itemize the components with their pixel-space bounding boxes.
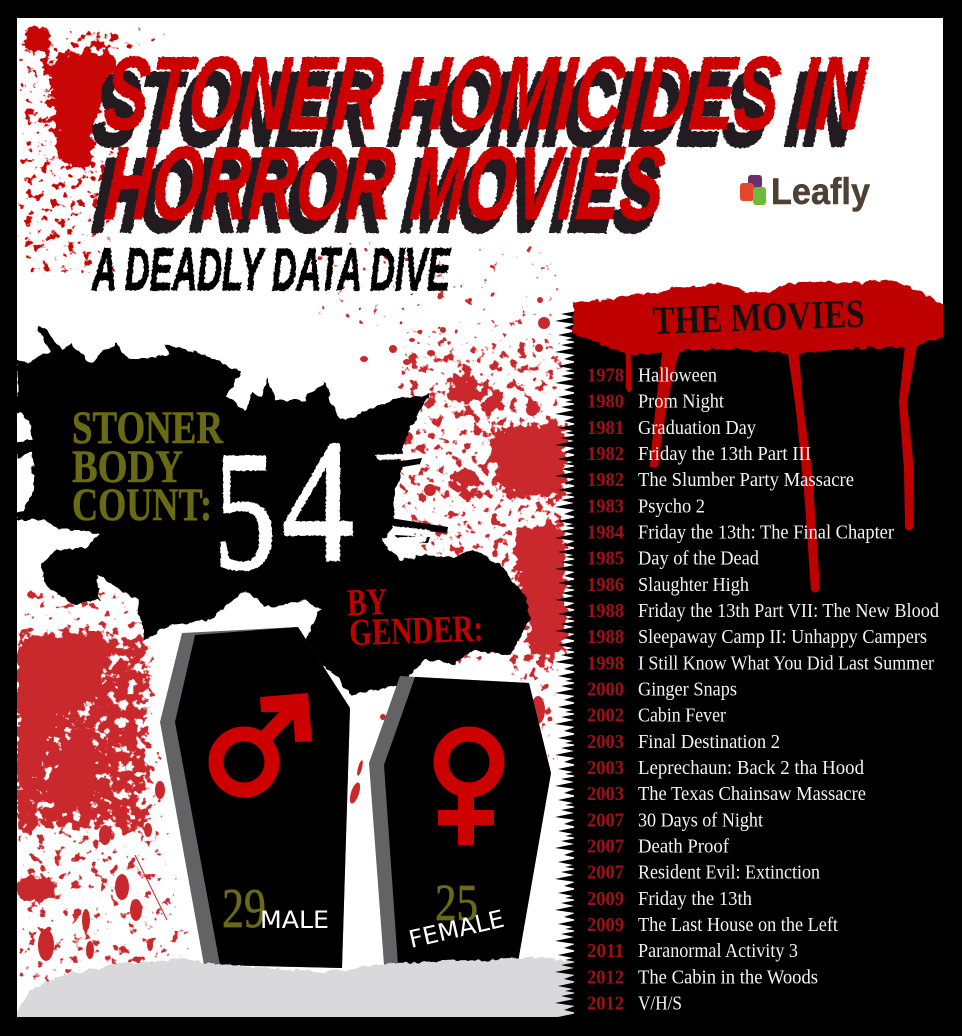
movie list: Graduation Day [638, 417, 756, 439]
blood banner with drips [573, 280, 948, 593]
movie list: The Texas Chainsaw Massacre [638, 783, 866, 805]
movie list: Day of the Dead [638, 548, 759, 570]
subtitle: A DEADLY DATA DIVE [91, 236, 451, 303]
male coffin [160, 627, 350, 968]
movie list: 2000 [587, 678, 624, 700]
female coffin [369, 676, 551, 965]
blood droplets [38, 714, 386, 961]
movie list: Death Proof [638, 836, 729, 858]
movie list: The Last House on the Left [638, 914, 838, 936]
male count: 29 [222, 878, 266, 940]
movies heading: THE MOVIES [652, 291, 865, 343]
movie list: 2009 [587, 914, 624, 936]
movies panel [553, 311, 944, 1019]
ink blob left side gaps [17, 412, 34, 512]
movie list: 2007 [587, 809, 624, 831]
movie list: Psycho 2 [638, 495, 705, 517]
movie list: 1984 [587, 522, 624, 544]
movie list: Slaughter High [638, 574, 749, 596]
movie list: Sleepaway Camp II: Unhappy Campers [638, 626, 927, 648]
blood splatter: top left [17, 25, 180, 280]
movie list: 1983 [587, 495, 624, 517]
blood spots: centre right [360, 297, 550, 724]
title [89, 36, 872, 254]
movie list: Friday the 13th [638, 888, 752, 910]
movie list: 1985 [587, 548, 624, 570]
body count number 54 [214, 404, 430, 605]
by gender label: GENDER: [349, 608, 484, 654]
ink strokes beside the count [390, 458, 448, 543]
movie list: 1981 [587, 417, 624, 439]
movie list: Friday the 13th: The Final Chapter [638, 522, 894, 544]
movie list: 2002 [587, 705, 624, 727]
movie list: 2012 [587, 966, 624, 988]
movie list: 1980 [587, 391, 624, 413]
movie list: 1978 [587, 364, 624, 386]
movie list: Paranormal Activity 3 [638, 940, 798, 962]
movie list: 1982 [587, 443, 624, 465]
movie list: 2011 [587, 940, 624, 962]
blood splatter: lower left [17, 585, 195, 1005]
movie list: 2003 [587, 757, 624, 779]
stoner body count label [72, 402, 224, 531]
icon: male symbol [216, 693, 312, 790]
movie list: Prom Night [638, 391, 724, 413]
blood splatter: centre right [300, 240, 565, 770]
movie list: 1986 [587, 574, 624, 596]
stoner body count label: BODY [72, 441, 183, 493]
movie list: 1998 [587, 652, 624, 674]
ink blob [17, 325, 530, 695]
movie list: Friday the 13th Part III [638, 443, 811, 465]
stoner body count label: STONER [72, 402, 224, 454]
movie list: 30 Days of Night [638, 809, 763, 831]
icon: female symbol [438, 734, 497, 845]
movie list: V/H/S [638, 993, 682, 1015]
by gender label: BY [346, 581, 388, 624]
movie list: The Slumber Party Massacre [638, 469, 854, 491]
movie list: Resident Evil: Extinction [638, 862, 820, 884]
movie list: 2003 [587, 731, 624, 753]
movie list: 1982 [587, 469, 624, 491]
snow ground [14, 957, 575, 1022]
movie list: Friday the 13th Part VII: The New Blood [638, 600, 939, 622]
by gender label [346, 578, 484, 654]
movie list: 2003 [587, 783, 624, 805]
movie list: Leprechaun: Back 2 tha Hood [638, 757, 864, 779]
movie list: 1988 [587, 626, 624, 648]
movie list: 2012 [587, 993, 624, 1015]
movie list: 2009 [587, 888, 624, 910]
female label: FEMALE [406, 905, 507, 954]
male label: MALE [260, 906, 329, 934]
movie list: Final Destination 2 [638, 731, 780, 753]
movie list: I Still Know What You Did Last Summer [638, 652, 934, 674]
movie list [587, 364, 939, 1015]
movie list: Cabin Fever [638, 705, 726, 727]
movie list: 1988 [587, 600, 624, 622]
body count number 54: 5 [214, 417, 276, 605]
body count number 54: 4 [282, 404, 354, 599]
stoner body count label: COUNT: [72, 479, 212, 531]
movie list: 2007 [587, 836, 624, 858]
movie list: Halloween [638, 364, 717, 386]
female count: 25 [435, 875, 478, 932]
movie list: Ginger Snaps [638, 678, 737, 700]
movie list: The Cabin in the Woods [638, 966, 818, 988]
leafly logo: Leafly [771, 171, 870, 212]
movie list: 2007 [587, 862, 624, 884]
